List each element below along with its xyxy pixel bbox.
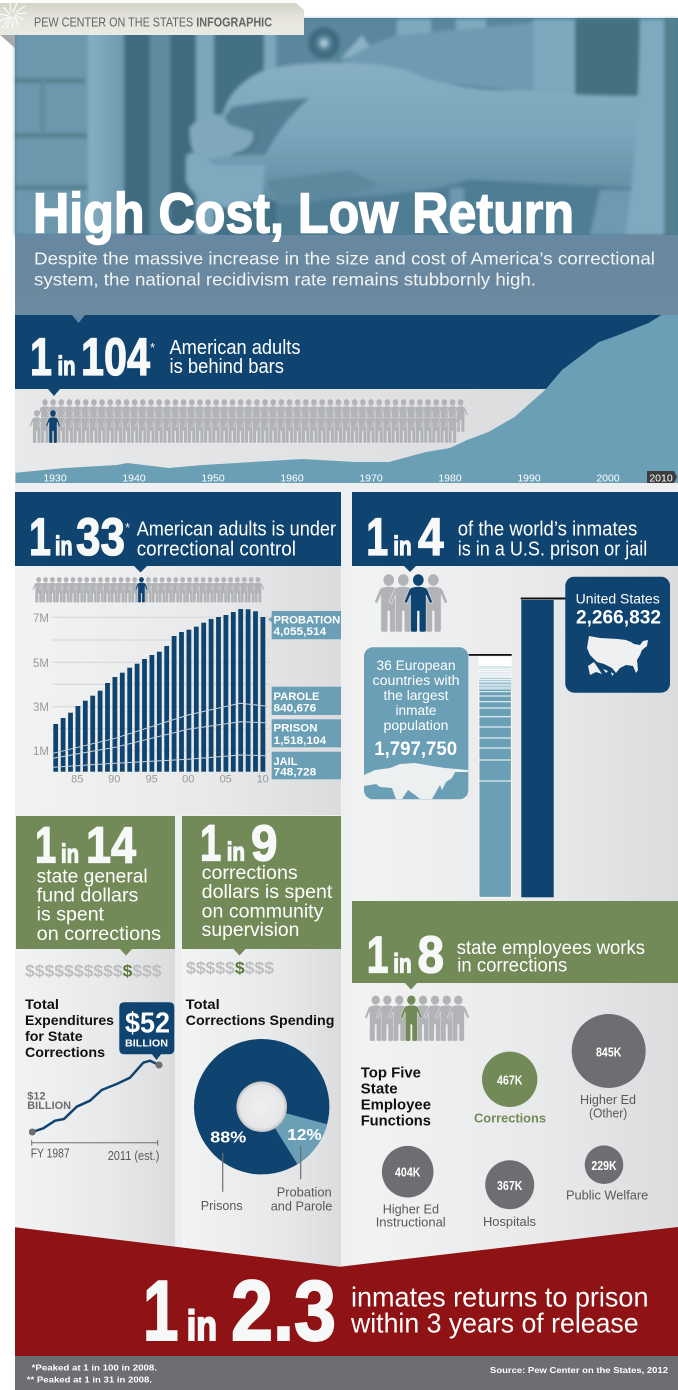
heading: total expenditures: for State [25, 1028, 83, 1044]
heading: top five functions [361, 1064, 431, 1129]
bubble: higher ed other: Higher Ed [580, 1092, 636, 1107]
label: jail: JAIL [274, 756, 298, 768]
stat label [458, 519, 647, 561]
stat: 1 in 2.3: 1 [143, 1264, 178, 1359]
bar chart: correctional population: 3M [33, 702, 49, 714]
stat: 1 in 33 [29, 508, 130, 567]
callout: United States [565, 577, 670, 693]
callout: European countries [364, 647, 468, 799]
label: prison [272, 719, 341, 747]
stat label [350, 1282, 648, 1339]
callout: United States: 2,266,832 [576, 607, 661, 628]
callout: European countries: 36 European [376, 658, 456, 673]
callout: European countries: population [384, 718, 448, 733]
label: probation: PROBATION [274, 614, 340, 626]
subtitle [34, 248, 655, 290]
dollar signs: 1 in 14: $$$$$$$$$$ $$$$ [25, 963, 162, 981]
stat label: on corrections [37, 924, 161, 945]
people: 1 in 33 [32, 577, 264, 603]
year axis: 1980 [438, 472, 462, 484]
bubble: higher ed instructional: 404K [395, 1166, 420, 1180]
year axis: 1930 [43, 472, 67, 484]
label: jail [272, 752, 341, 779]
stat: 1 in 4: 4 [418, 508, 444, 567]
stat label: correctional control [137, 539, 296, 561]
stat: 1 in 4: 1 [366, 508, 388, 567]
stat: 1 in 4: in [393, 531, 412, 561]
year axis: 1940 [122, 472, 146, 484]
label: jail: 748,728 [274, 767, 316, 779]
bar: European countries [469, 654, 512, 897]
stat label: fund dollars [37, 886, 138, 907]
year axis [43, 471, 677, 484]
donut chart: spending split: 12% [287, 1127, 322, 1144]
bubble: hospitals [483, 1160, 536, 1229]
bubble: higher ed instructional: Higher Ed [383, 1201, 439, 1216]
line chart: expenditures: 2011 (est.) [108, 1149, 159, 1163]
bar chart: correctional population: 00 [182, 774, 194, 786]
stat label: American adults is under [137, 519, 336, 541]
stat label: is behind bars [170, 356, 284, 378]
stat: 1 in 33: 1 [29, 508, 51, 567]
heading: top five functions: Functions [361, 1112, 431, 1129]
stat label [202, 863, 333, 941]
stat label [137, 519, 336, 561]
stat label [170, 337, 300, 378]
panel: 1 in 8 [352, 901, 678, 1273]
stat: 1 in 8: 1 [367, 927, 388, 985]
footnotes: ** Peaked at 1 in 31 in 2008. [27, 1374, 152, 1384]
label: parole: PAROLE [274, 691, 320, 703]
stat: 1 in 9: in [227, 837, 245, 867]
header tab: PEW CENTER ON THE STATES INFOGRAPHIC [34, 16, 272, 30]
heading: total expenditures: Corrections [25, 1044, 105, 1060]
bubble: public welfare: 229K [591, 1159, 617, 1173]
stat: 1 in 2.3: 2.3 [231, 1264, 336, 1359]
callout: United States: United States [576, 591, 660, 606]
subtitle: Despite the massive increase in the size and cost of America’s correctional [34, 248, 655, 268]
heading: top five functions: Employee [361, 1096, 431, 1113]
stat: 1 in 8: in [393, 949, 412, 979]
divider background [15, 483, 678, 1273]
icon: map of Eurasia [364, 763, 468, 799]
stat: 1 in 33: 33 [76, 508, 125, 567]
label: parole: 840,676 [274, 703, 316, 715]
callout: European countries: inmate [396, 703, 436, 718]
dollar signs: 1 in 9: $$$$$$$$$ [186, 959, 274, 977]
stat: 1 in 8: 8 [418, 927, 444, 985]
bubble: corrections [474, 1052, 546, 1126]
stat: 1 in 33: * [125, 520, 130, 535]
icon: US map [587, 636, 648, 676]
source: Source: Pew Center on the States, 2012 [490, 1365, 668, 1375]
bubble: corrections: Corrections [474, 1111, 546, 1126]
bubble: public welfare: Public Welfare [566, 1187, 648, 1202]
label: probation [268, 611, 341, 639]
stat label: corrections [202, 863, 298, 884]
line chart: expenditures: FY 1987 [31, 1147, 70, 1161]
stat label: within 3 years of release [350, 1308, 639, 1339]
bar chart: correctional population: 5M [33, 658, 49, 670]
heading: total corrections spending [186, 996, 334, 1028]
bar chart: correctional population: 1M [33, 746, 49, 758]
stat: 1 in 2.3 [143, 1264, 336, 1359]
bar chart: correctional population: 95 [146, 774, 158, 786]
donut chart: spending split: Prisons [201, 1198, 243, 1213]
stat: 1 in 104: in [58, 351, 76, 381]
bar chart: correctional population: 05 [220, 774, 232, 786]
bubble: higher ed instructional: Instructional [376, 1215, 446, 1230]
stat: 1 in 8 [367, 927, 444, 985]
label: parole [272, 687, 341, 715]
donut chart: spending split: Probation [277, 1185, 332, 1200]
panel: 1 in 33 [15, 492, 341, 815]
line chart: expenditures [27, 1061, 162, 1163]
callout: European countries: 1,797,750 [374, 739, 457, 760]
year axis: 1990 [517, 472, 541, 484]
callout: European countries: countries with [372, 673, 460, 688]
bubble: public welfare [566, 1145, 648, 1202]
panel: 1 in 9 [182, 815, 341, 1273]
stat: 1 in 9: 1 [200, 815, 221, 872]
bubble: higher ed other: 845K [596, 1046, 621, 1060]
stat: 1 in 104 [30, 328, 155, 387]
footnotes [27, 1363, 157, 1384]
stat: 1 in 104: * [150, 340, 155, 355]
hero photo: hands through bars [15, 18, 678, 235]
stat label: of the world’s inmates [458, 519, 637, 541]
stat label: state general [37, 867, 148, 888]
bubble: hospitals: Hospitals [483, 1214, 536, 1229]
bar chart: correctional population: 90 [108, 774, 120, 786]
people: 1 in 104 [29, 399, 468, 443]
bar chart: correctional population: 85 [71, 774, 83, 786]
stat label: supervision [202, 920, 299, 941]
banner: 1 in 2.3 [15, 1227, 678, 1359]
heading: total expenditures: Total [25, 996, 59, 1012]
stat: 1 in 104: 104 [81, 328, 150, 387]
stat label: on community [202, 901, 324, 922]
donut chart: spending split: and Parole [271, 1199, 332, 1214]
stat: 1 in 104: 1 [30, 328, 52, 387]
stat label: state employees works [457, 937, 645, 959]
people: 1 in 8 [365, 995, 469, 1041]
stat label: is in a U.S. prison or jail [458, 539, 647, 561]
bubble: corrections: 467K [497, 1073, 522, 1087]
heading: top five functions: Top Five [361, 1064, 421, 1081]
heading: total corrections spending: Total [186, 996, 220, 1012]
caption band [15, 235, 678, 315]
panel: 1 in 104 timeline [15, 315, 678, 484]
year axis: 2000 [596, 472, 620, 484]
year axis: 1960 [280, 472, 304, 484]
callout: $52 billion: $52 [125, 1008, 170, 1040]
callout: European countries: the largest [384, 688, 449, 703]
bubble: hospitals: 367K [497, 1179, 522, 1193]
label: probation: 4,055,514 [274, 626, 327, 638]
bubble: higher ed other [572, 1014, 646, 1120]
subtitle: system, the national recidivism rate remains stubbornly high. [34, 270, 536, 290]
stat: 1 in 2.3: in [187, 1302, 217, 1349]
bar: United States [521, 598, 567, 897]
line chart: expenditures: $12 [27, 1090, 46, 1102]
year axis: 1970 [359, 472, 383, 484]
panel: 1 in 14 [16, 816, 175, 1273]
stat: 1 in 14: 1 [35, 817, 56, 874]
donut chart: spending split [194, 1039, 332, 1214]
label: prison: PRISON [274, 723, 318, 735]
title: High Cost, Low Return [33, 182, 574, 246]
stat: 1 in 14: 14 [86, 817, 137, 874]
panel: 1 in 4 [352, 492, 678, 901]
bar chart: correctional population: 7M [33, 613, 49, 625]
stat: 1 in 33: in [55, 531, 72, 561]
heading: total corrections spending: Corrections Spending [186, 1012, 334, 1028]
stat label: in corrections [457, 955, 568, 977]
stat: 1 in 14: in [61, 839, 79, 869]
callout: $52 billion: BILLION [125, 1038, 168, 1050]
line chart: expenditures: BILLION [27, 1100, 71, 1112]
stat: 1 in 4 [366, 508, 444, 567]
heading: total expenditures [25, 996, 114, 1060]
stat: 1 in 14 [35, 817, 137, 874]
stat label [457, 937, 645, 977]
donut chart: spending split: 88% [210, 1130, 247, 1147]
stat: 1 in 9: 9 [251, 815, 278, 872]
heading: top five functions: State [361, 1080, 398, 1097]
stat label: is spent [37, 905, 105, 926]
year axis: 2010 [649, 472, 673, 484]
bubble: higher ed other: (Other) [589, 1105, 627, 1120]
bubble: higher ed instructional [376, 1146, 446, 1230]
stat label [37, 867, 161, 945]
stat label: American adults [170, 337, 300, 359]
label: prison: 1,518,104 [274, 735, 327, 747]
area chart: incarceration growth [16, 315, 678, 483]
footnotes: *Peaked at 1 in 100 in 2008. [32, 1363, 157, 1373]
stat label: inmates returns to prison [351, 1282, 648, 1313]
stat: 1 in 9 [200, 815, 278, 872]
callout: $52 billion [119, 1002, 174, 1060]
footer [15, 1356, 678, 1390]
bar chart: correctional population [33, 609, 270, 786]
people: 1 in 4 [374, 574, 448, 632]
bar chart: correctional population: 10 [257, 774, 269, 786]
heading: total expenditures: Expenditures [25, 1012, 114, 1028]
header tab [0, 3, 304, 48]
timeline background [15, 389, 678, 483]
year axis: 1950 [201, 472, 225, 484]
stat label: dollars is spent [202, 882, 333, 903]
